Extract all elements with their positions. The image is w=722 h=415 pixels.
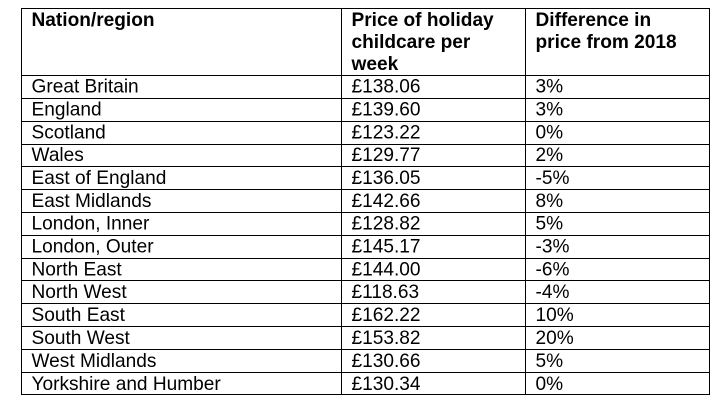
row: South East: [32, 305, 574, 326]
row: Great Britain: 3%: [536, 76, 563, 98]
row: East of England: £136.05: [352, 168, 421, 189]
row: East of England: East of England: [32, 168, 166, 189]
row: England: England: [32, 100, 102, 120]
row: London, Outer: £145.17: [352, 236, 421, 258]
row: Scotland: £123.22: [352, 122, 421, 144]
row: North East: -6%: [536, 260, 569, 280]
row: West Midlands: £130.66: [352, 351, 421, 372]
row: Wales: Wales: [32, 145, 84, 166]
row: Scotland: 0%: [536, 122, 563, 144]
row: North West: -4%: [536, 282, 569, 303]
row: North East: North East: [32, 260, 122, 280]
row: East Midlands: East Midlands: [32, 191, 151, 212]
row: Yorkshire and Humber: 0%: [536, 374, 563, 395]
row: South East: 10%: [536, 305, 574, 326]
row: Wales: 2%: [536, 145, 563, 166]
header row: [32, 10, 677, 75]
row: South West: [32, 328, 574, 349]
header: difference in price from 2018: price from 2018: [536, 32, 677, 53]
row: East Midlands: [32, 191, 563, 212]
row: Yorkshire and Humber: £130.34: [352, 374, 421, 395]
row: South West: South West: [32, 328, 131, 349]
row: East Midlands: 8%: [536, 191, 563, 212]
row: Yorkshire and Humber: [32, 374, 563, 395]
row: Great Britain: £138.06: [352, 76, 421, 98]
row: North East: £144.00: [352, 260, 421, 280]
row: North West: North West: [32, 282, 127, 303]
row: East Midlands: £142.66: [352, 191, 421, 212]
header: nation/region: Nation/region: [32, 10, 155, 31]
row: South West: £153.82: [352, 328, 421, 349]
row: West Midlands: West Midlands: [32, 351, 156, 372]
row: Great Britain: [32, 76, 563, 98]
row: London, Inner: 5%: [536, 214, 563, 234]
row: North East: [32, 260, 569, 280]
row: London, Outer: London, Outer: [32, 236, 154, 258]
row: North West: [32, 282, 569, 303]
row: Scotland: [32, 122, 563, 144]
row: London, Inner: £128.82: [352, 214, 421, 234]
row: Wales: £129.77: [352, 145, 421, 166]
row: England: 3%: [536, 100, 563, 120]
row: West Midlands: 5%: [536, 351, 563, 372]
row: London, Outer: -3%: [536, 236, 569, 258]
row: Wales: [32, 145, 563, 166]
row: South East: £162.22: [352, 305, 421, 326]
row: England: [32, 100, 563, 120]
row: Great Britain: Great Britain: [32, 76, 139, 98]
row: London, Outer: [32, 236, 569, 258]
row: West Midlands: [32, 351, 563, 372]
row: England: £139.60: [352, 100, 421, 120]
header: price of holiday childcare per week: Price of holiday: [352, 10, 494, 31]
row: South West: 20%: [536, 328, 574, 349]
row: North West: £118.63: [352, 282, 419, 303]
row: East of England: -5%: [536, 168, 569, 189]
header: price of holiday childcare per week: week: [350, 54, 399, 75]
header: price of holiday childcare per week: childcare per: [352, 32, 471, 53]
row: Scotland: Scotland: [32, 122, 106, 144]
row: South East: South East: [32, 305, 126, 326]
row: East of England: [32, 168, 569, 189]
row: Yorkshire and Humber: Yorkshire and Humber: [32, 374, 221, 395]
row: London, Inner: London, Inner: [32, 214, 150, 234]
row: London, Inner: [32, 214, 563, 234]
header: difference in price from 2018: Difference in: [536, 10, 651, 31]
